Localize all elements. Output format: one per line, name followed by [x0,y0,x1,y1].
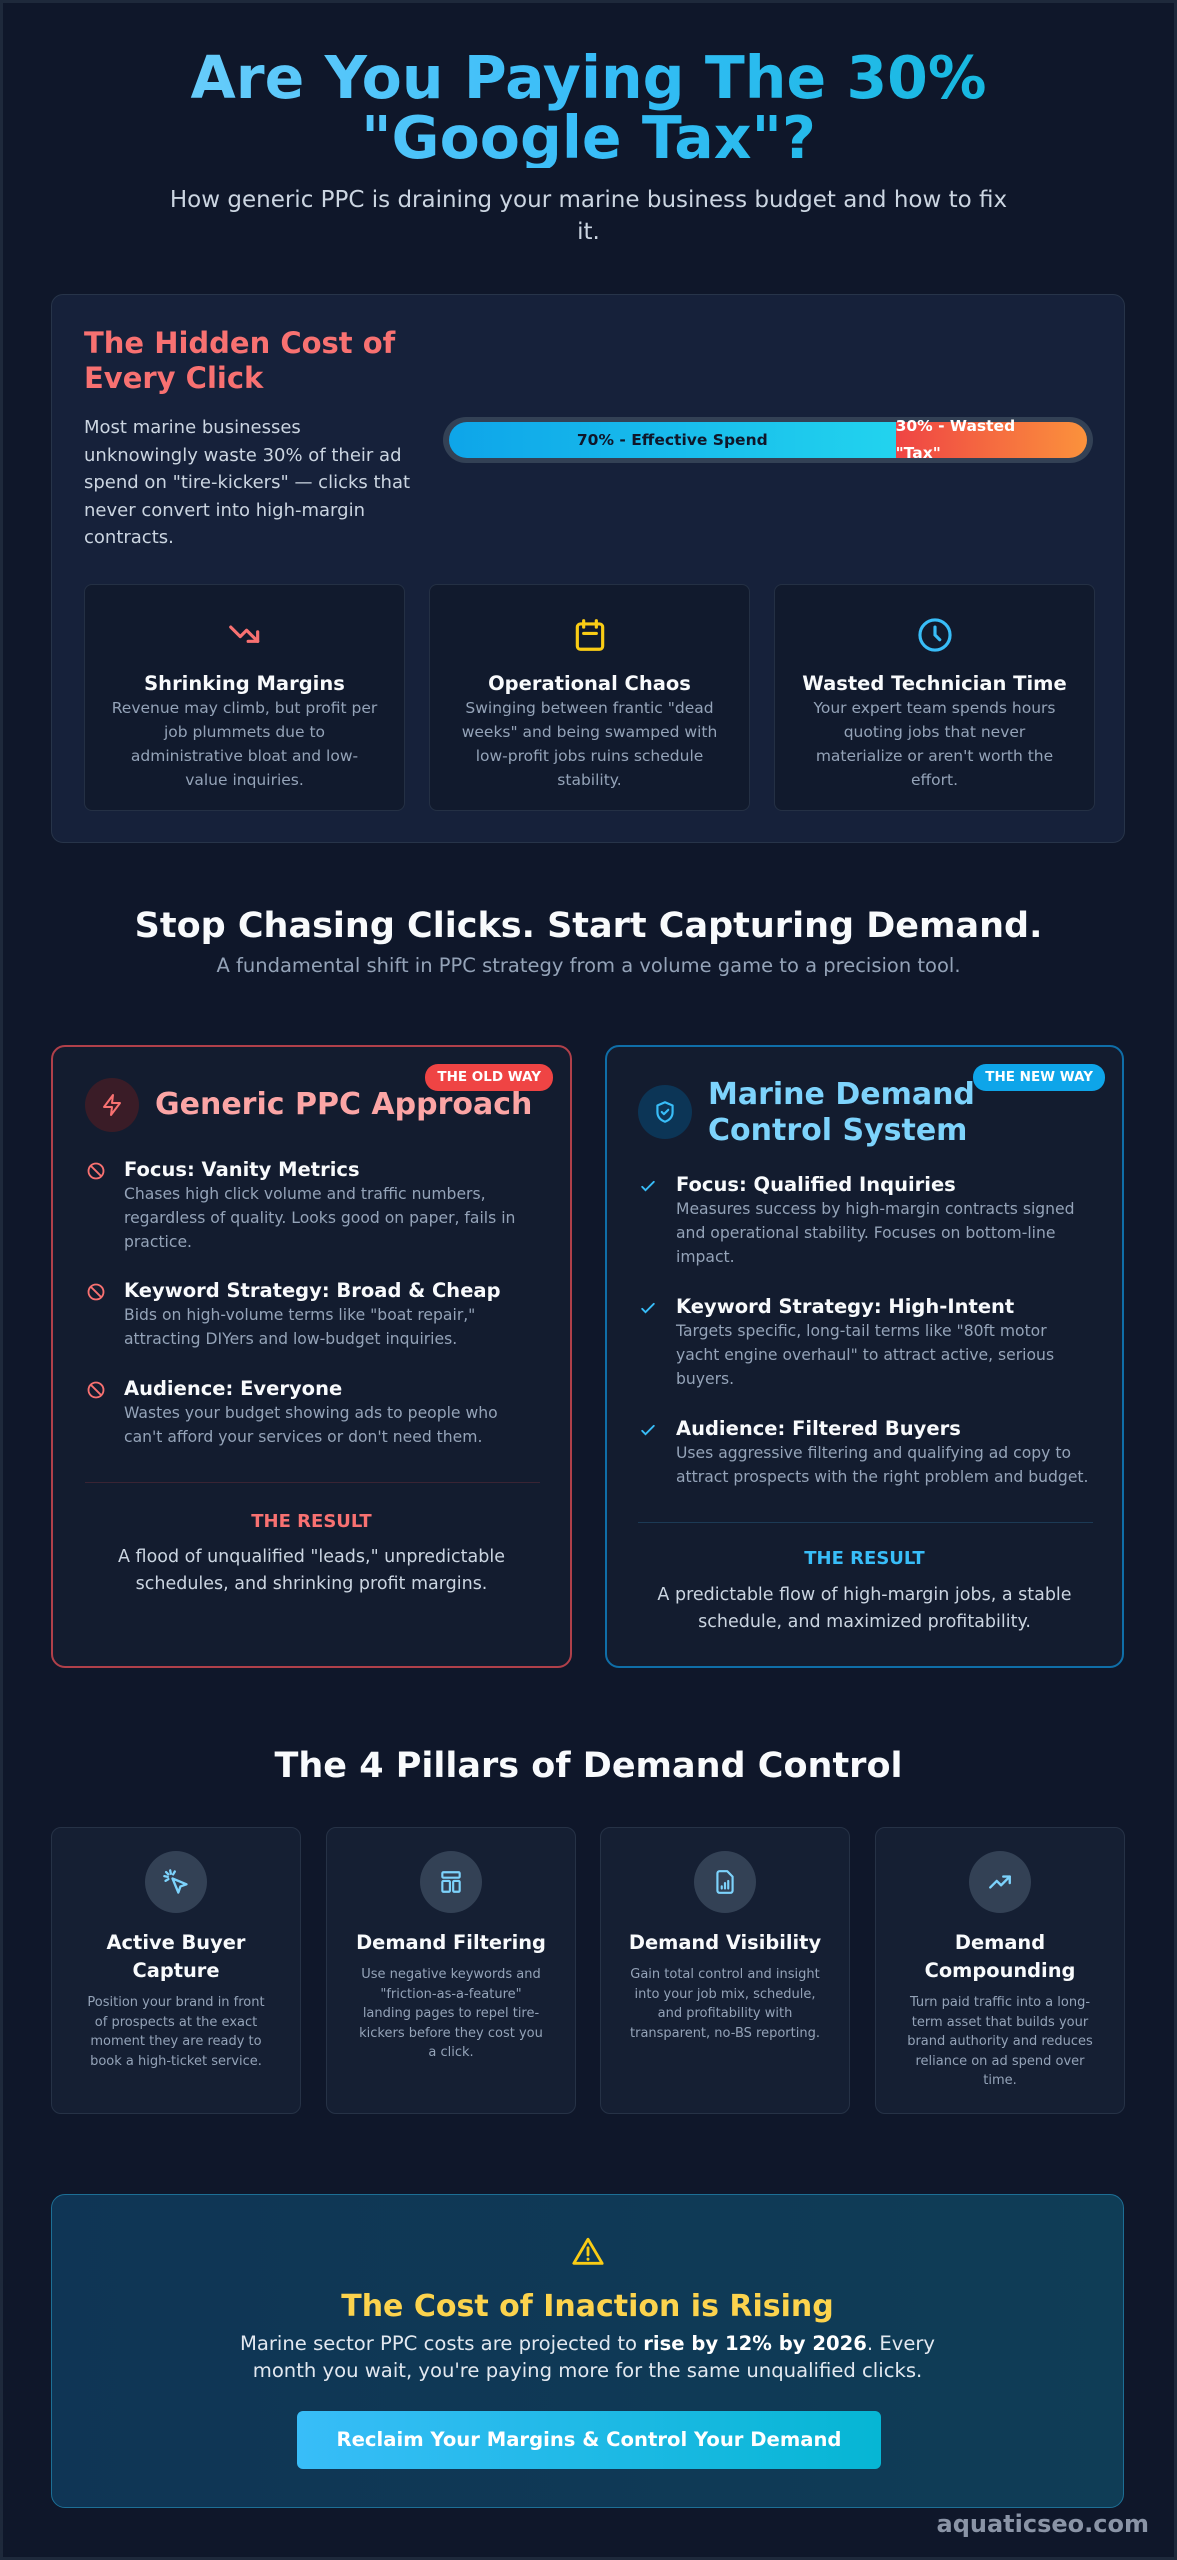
item: vanity metrics: Focus: Vanity Metrics [124,1158,360,1181]
title [0,48,1177,168]
pillar: demand filtering [326,1827,576,2114]
card: wasted technician time [774,584,1095,811]
badge: new way [973,1064,1105,1091]
icon: clock [918,618,952,652]
pillar: demand visibility: Gain total control and insight into your job mix, schedule, and profitability with transparent, no-BS reporting. [630,1967,820,2040]
item: vanity metrics [88,1158,515,1251]
panel: hidden cost [51,294,1125,843]
icon: warning [572,2238,604,2265]
bar segment: wasted tax: "Tax" [896,444,941,462]
result: new way: A predictable flow of high-margin jobs, a stable schedule, and maximized profitability. [657,1585,1072,1632]
result: new way: THE RESULT [804,1548,925,1569]
pillar: demand filtering: Use negative keywords and "friction-as-a-feature" landing pages to repel tire-kickers before they cost you a click. [359,1967,543,2060]
pillar: active buyer capture [51,1827,301,2114]
icon: lightning [85,1078,139,1132]
item: qualified inquiries [641,1173,1075,1266]
item: vanity metrics: Chases high click volume and traffic numbers, regardless of quality. Looks good on paper, fails in practice. [124,1185,515,1251]
chart: spend bar [443,417,1093,463]
button: cta [297,2411,881,2469]
item: high-intent keywords: Targets specific, long-tail terms like "80ft motor yacht engine overhaul" to attract active, serious buyers. [676,1322,1054,1388]
item: filtered buyers: Audience: Filtered Buyers [676,1417,961,1440]
icon: trending up [969,1851,1031,1913]
pillar: demand visibility [600,1827,850,2114]
item: audience everyone: Wastes your budget showing ads to people who can't afford your services or don't need them. [124,1404,498,1446]
result: old way: THE RESULT [251,1511,372,1532]
icon: cursor click [145,1851,207,1913]
item: audience everyone: Audience: Everyone [124,1377,342,1400]
item: broad keywords: Bids on high-volume terms like "boat repair," attracting DIYers and low-budget inquiries. [124,1306,475,1348]
subheading: A fundamental shift in PPC strategy from a volume game to a precision tool. [216,954,961,977]
item: high-intent keywords [641,1295,1054,1388]
item: audience everyone [88,1377,498,1446]
card: shrinking margins: Revenue may climb, but profit per job plummets due to administrative bloat and low-value inquiries. [112,699,377,789]
heading: marine demand control: Control System [708,1113,967,1148]
item: filtered buyers [641,1417,1088,1486]
item: high-intent keywords: Keyword Strategy: High-Intent [676,1295,1014,1318]
title: "Google Tax"? [361,104,816,172]
item: qualified inquiries: Focus: Qualified Inquiries [676,1173,956,1196]
text: cost projection: Marine sector PPC costs are projected to rise by 12% by 2026. Every month you wait, you're paying more for the same unqualified clicks. [240,2332,935,2382]
pillar: demand compounding [875,1827,1125,2114]
pillar: demand compounding: Turn paid traffic into a long-term asset that builds your brand authority and reduces reliance on ad spend over time. [907,1995,1093,2088]
result: old way: A flood of unqualified "leads," unpredictable schedules, and shrinking profit margins. [118,1547,505,1594]
item: broad keywords [88,1279,501,1348]
pillar: active buyer capture: Position your brand in front of prospects at the exact moment they are ready to book a high-ticket service. [87,1995,265,2068]
card: operational chaos: Operational Chaos [488,672,691,695]
pillar: active buyer capture: Active Buyer Capture [107,1931,245,1982]
pillar: demand filtering: Demand Filtering [356,1931,546,1954]
text: hidden cost description: Most marine businesses unknowingly waste 30% of their ad spend on "tire-kickers" — clicks that never convert into high-margin contracts. [84,417,410,548]
item: broad keywords: Keyword Strategy: Broad & Cheap [124,1279,501,1302]
card: wasted technician time: Your expert team spends hours quoting jobs that never materialize or aren't worth the effort. [813,699,1056,789]
card: shrinking margins: Shrinking Margins [144,672,345,695]
bar segment: effective spend [449,422,896,458]
result: new way [657,1548,1072,1632]
bar segment: wasted tax: 30% - Wasted [896,417,1015,435]
item: filtered buyers: Uses aggressive filtering and qualifying ad copy to attract prospects with the right problem and budget. [676,1444,1088,1486]
card: wasted technician time: Wasted Technician Time [802,672,1067,695]
icon: filter layout [420,1851,482,1913]
card: shrinking margins [84,584,405,811]
card: operational chaos: Swinging between frantic "dead weeks" and being swamped with low-profit jobs ruins schedule stability. [462,699,717,789]
heading: marine demand control [708,1077,975,1148]
icon: shield [638,1085,692,1139]
pillar: demand compounding: Demand Compounding [925,1931,1075,1982]
card: operational chaos [429,584,750,811]
badge: new way: THE NEW WAY [985,1069,1093,1085]
icon: trending down [229,625,260,643]
item: qualified inquiries: Measures success by high-margin contracts signed and operational stability. Focuses on bottom-line impact. [676,1200,1075,1266]
result: old way [118,1511,505,1594]
panel: new way [605,1045,1124,1668]
badge: old way: THE OLD WAY [437,1069,541,1085]
pillar: demand visibility: Demand Visibility [629,1931,821,1954]
subtitle: How generic PPC is draining your marine business budget and how to fix it. [170,187,1007,245]
callout: cost of inaction [51,2194,1124,2508]
heading: marine demand control: Marine Demand [708,1077,975,1112]
bar segment: effective spend: 70% - Effective Spend [577,431,768,449]
title: Are You Paying The 30% [190,44,987,112]
icon: report file [694,1851,756,1913]
watermark: aquaticseo.com [937,2510,1149,2538]
panel: old way [51,1045,572,1668]
heading: stop chasing clicks: Stop Chasing Clicks. Start Capturing Demand. [135,906,1042,946]
heading: 4 pillars: The 4 Pillars of Demand Control [275,1746,902,1786]
icon: calendar [576,619,604,651]
heading: cost of inaction: The Cost of Inaction is Rising [341,2289,834,2324]
badge: old way [425,1064,553,1091]
heading: generic ppc: Generic PPC Approach [155,1087,532,1122]
bar segment: wasted tax [896,422,1087,458]
button: cta: Reclaim Your Margins & Control Your Demand [337,2428,841,2451]
heading: hidden cost: The Hidden Cost of Every Click [84,326,395,395]
